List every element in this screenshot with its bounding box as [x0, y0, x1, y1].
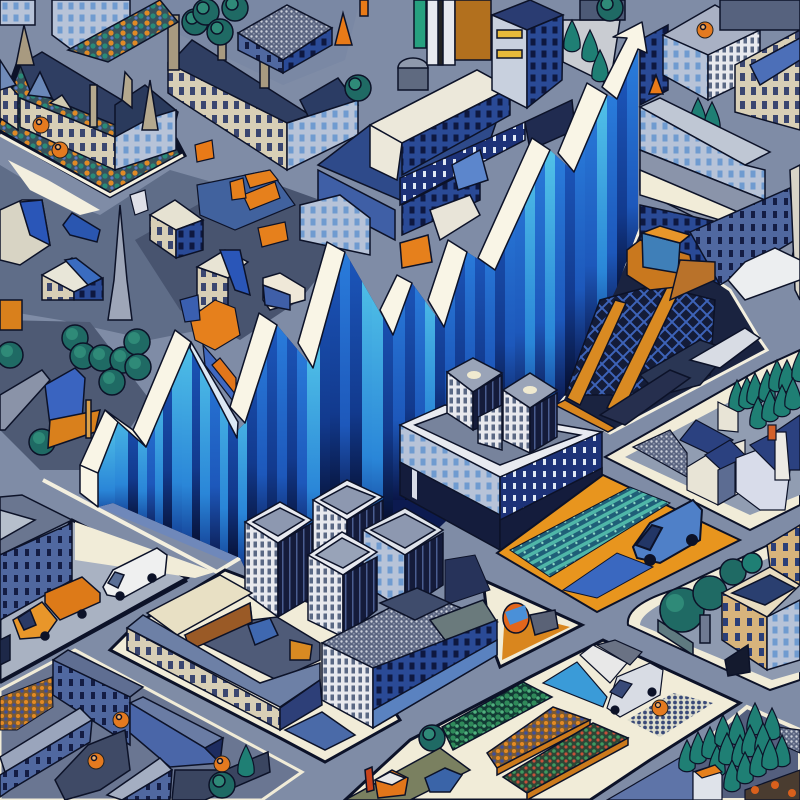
- left excavator: [0, 300, 100, 448]
- top-centre hall: [300, 58, 575, 268]
- top-right blocks: [640, 0, 800, 134]
- L-shaped courtyard building: [127, 575, 355, 750]
- bottom gardens: [345, 682, 628, 800]
- rig plot ground: [560, 230, 767, 433]
- right factory: [640, 98, 800, 300]
- right-side rubble, cottages and pines: [633, 350, 800, 510]
- bottom-right block with pines: [607, 703, 800, 800]
- chart: blue stripes: [98, 51, 638, 568]
- bottom-right tan houses and trees: [658, 525, 800, 676]
- water tank and delivery truck: [543, 640, 713, 737]
- centre towers in front of chart: [245, 480, 443, 637]
- bottom-left terraces: [0, 650, 270, 800]
- top-centre gothic terrace: [122, 15, 358, 170]
- left mid houses and car: [0, 200, 305, 320]
- lower-centre white block: [322, 588, 558, 728]
- lower stack beside towers: [445, 555, 490, 605]
- orange machinery cluster: [130, 140, 295, 405]
- rubble-roof block and orange cone: [238, 0, 368, 73]
- top-left upper buildings and garden: [0, 0, 371, 158]
- white van: [103, 548, 167, 600]
- orange mining rig: [555, 226, 760, 432]
- left tree clump: [0, 325, 151, 455]
- chart: white rising ribbon with arrow: [80, 22, 647, 507]
- orange truck: [13, 577, 100, 640]
- bottom-left garden plot: [0, 677, 53, 730]
- central foreground building with towers: [400, 358, 602, 550]
- top-left gothic terrace: [0, 25, 178, 170]
- top towers: [414, 0, 625, 108]
- left navy building: [0, 495, 72, 665]
- orange plot with greenhouse rows, tarps and van: [497, 475, 740, 612]
